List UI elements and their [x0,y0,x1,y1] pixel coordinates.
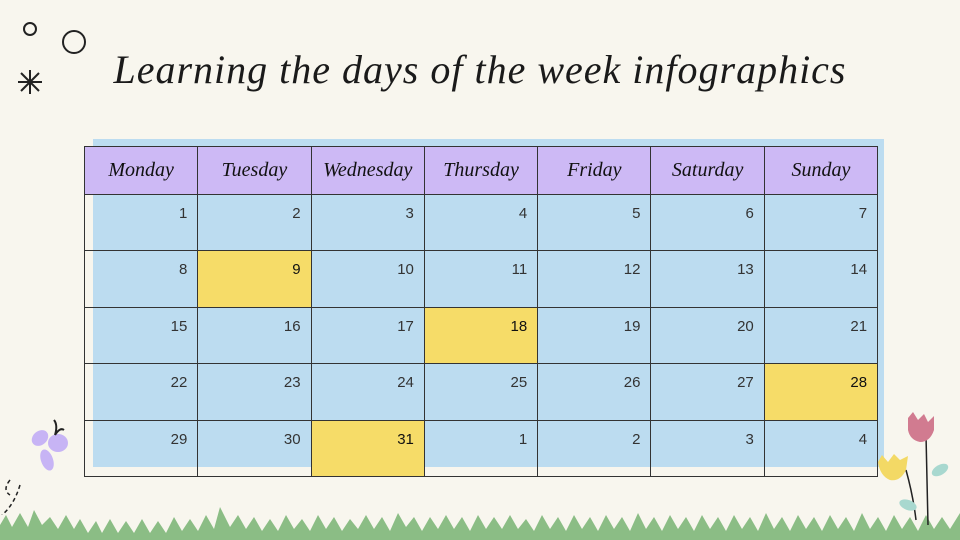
calendar table: 31 [397,431,414,448]
calendar table: 9 [292,261,301,278]
calendar table: Wednesday [323,159,412,181]
calendar table: 4 [519,205,527,222]
calendar table: 28 [850,374,867,391]
calendar table: 26 [624,374,640,391]
calendar table: Saturday [672,159,743,181]
calendar table: 16 [284,318,301,335]
calendar table: Tuesday [222,159,287,181]
calendar table: 4 [859,431,867,448]
calendar table: 17 [397,318,414,335]
calendar table: 2 [292,205,301,222]
calendar table: 7 [859,205,867,222]
calendar table: 2 [632,431,640,448]
calendar table: Friday [567,159,622,181]
calendar table: 11 [512,261,527,278]
calendar table: 13 [737,261,754,278]
calendar table: 25 [510,374,527,391]
calendar table: 8 [179,261,187,278]
calendar table: 14 [850,261,867,278]
calendar table: 23 [284,374,301,391]
calendar table: 20 [737,318,754,335]
calendar table: 1 [179,205,187,222]
grass [0,507,960,540]
calendar table: 22 [171,374,187,391]
calendar table: Thursday [443,159,519,181]
calendar table: 3 [745,431,754,448]
calendar table [84,146,878,477]
calendar background [93,139,884,467]
calendar table: 15 [171,318,187,335]
calendar table: 29 [171,431,187,448]
icon: butterfly [2,419,68,515]
calendar table: 5 [632,205,640,222]
calendar table: Monday [108,159,174,181]
calendar table: 3 [406,205,414,222]
icon: flowers [878,412,948,525]
calendar table: 27 [737,374,754,391]
calendar table: 19 [624,318,640,335]
calendar table: 1 [519,431,527,448]
calendar table: 6 [745,205,754,222]
calendar table: 18 [510,318,527,335]
calendar table: 24 [397,374,414,391]
calendar table: 10 [397,261,414,278]
decoration: circles and asterisk [18,22,86,94]
calendar table: Sunday [791,159,850,181]
calendar table: 30 [284,431,301,448]
calendar table: 12 [624,261,640,278]
calendar table: 21 [850,318,867,335]
title: Learning the days of the week infographics [113,47,846,92]
